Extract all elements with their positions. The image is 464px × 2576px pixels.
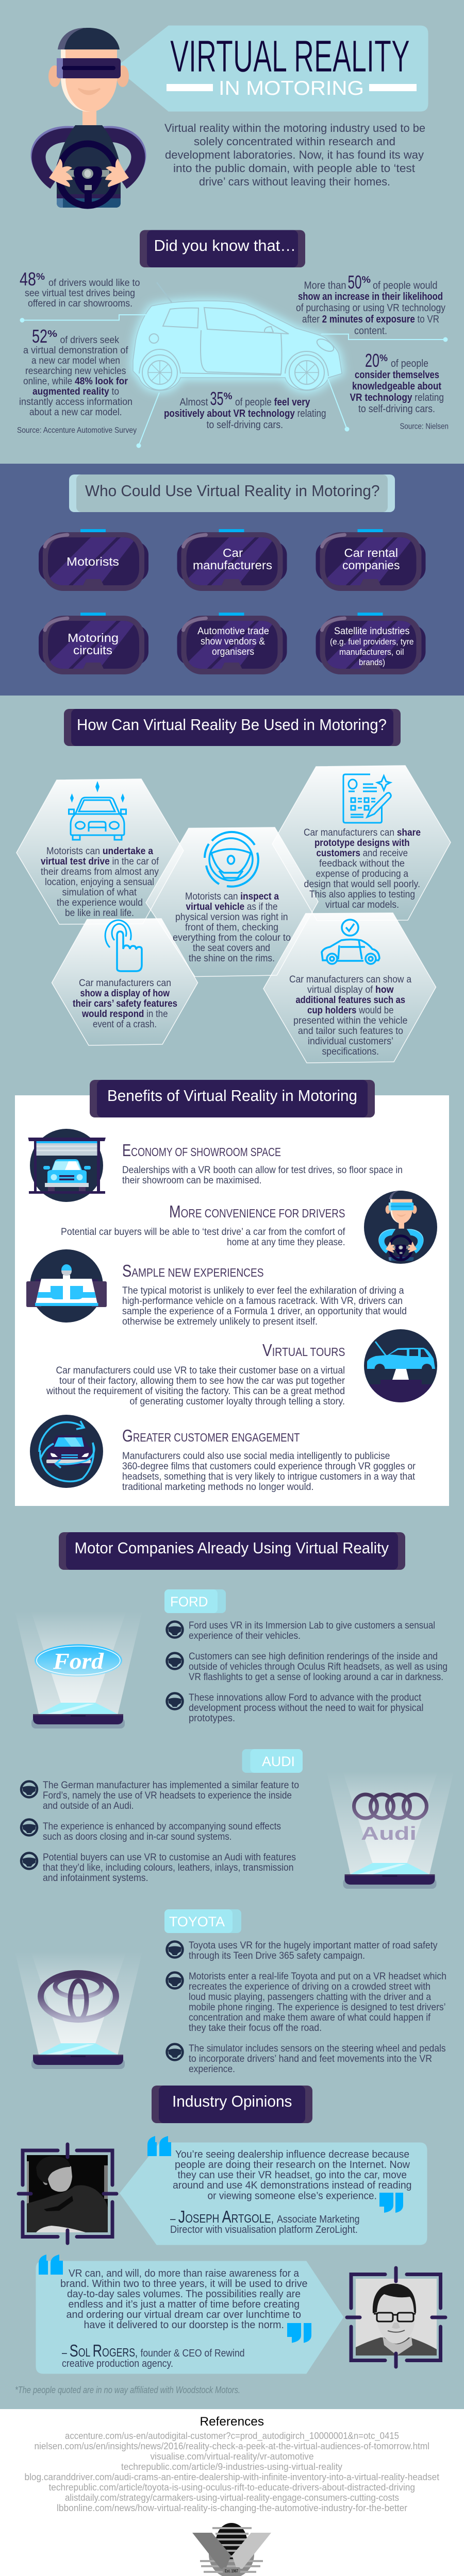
reference links: blog.caranddriver.com/audi-crams-an-entire-dealership-with-infinite-inventory-into-a-virtual-reality-headset xyxy=(25,2472,439,2482)
heading: how can VR be used xyxy=(64,709,401,746)
bullets: Ford xyxy=(167,1620,448,1724)
quote text: and ordering our virtual dream car over lunchtime to xyxy=(66,2309,301,2320)
text: inspect virtual vehicle: virtual vehicle as if the xyxy=(186,902,277,912)
text: virtual test drive: location, enjoying a sensual xyxy=(45,877,154,888)
reference links: accenture.com/us-en/autodigital-customer?c=prod_autodigirch_10000001&n=otc_0415 xyxy=(65,2431,399,2442)
icon: touch finger xyxy=(105,920,142,971)
stat: 48%: see virtual test drives being xyxy=(25,288,135,299)
bullets: Audi: and infotainment systems. xyxy=(43,1873,148,1884)
goggle: satellite industries: (e.g. fuel providers, tyre xyxy=(330,637,413,647)
benefit: more convenience: Potential car buyers will be able to ‘test drive’ a car from the comfort of xyxy=(61,1227,345,1238)
benefit: virtual tours: tour of their factory, allowing them to see how the car was put together xyxy=(59,1376,345,1386)
heading: who could use xyxy=(69,474,395,512)
heading: did you know: Did you know that… xyxy=(154,236,296,255)
stat: 52%: researching new vehicles xyxy=(25,366,126,377)
bullets: Toyota: experience. xyxy=(189,2064,235,2075)
benefit: greater customer engagement xyxy=(122,1426,416,1493)
bullets: Ford: experience of their vehicles. xyxy=(189,1631,301,1641)
icon: car with tick xyxy=(322,920,379,964)
bullets: Ford: Customers can see high definition renderings of the inside and xyxy=(189,1651,438,1662)
goggle: car manufacturers xyxy=(177,529,287,591)
attribution: Director with visualisation platform ZeroLight. xyxy=(170,2224,358,2235)
benefit: virtual tours: Car manufacturers could use VR to take their customer base on a virtual xyxy=(56,1365,345,1376)
benefit: sample new experiences xyxy=(122,1261,407,1327)
text: safety features display: their cars’ safety features xyxy=(73,998,177,1009)
heading: who could use: Who Could Use Virtual Reality in Motoring? xyxy=(85,482,379,500)
stat: 48%: 48 xyxy=(20,268,36,290)
stat: 52%: about a new car model. xyxy=(29,407,122,418)
stat: 50%: More than xyxy=(304,280,346,292)
goggle: trade show vendors xyxy=(177,613,287,674)
icon: showroom garage xyxy=(28,1129,106,1202)
Ford badge: Ford xyxy=(53,1649,104,1674)
reference links: visualise.com/virtual-reality/vr-automotive xyxy=(151,2451,313,2462)
stat: 20%: VR technology relating xyxy=(350,392,444,403)
benefit: greater customer engagement: traditional marketing methods no longer would. xyxy=(122,1482,313,1493)
reference links: lbbonline.com/news/how-virtual-reality-is-changing-the-automotive-industry-for-the-better xyxy=(57,2503,407,2513)
stat: 52%: online, while 48% look for xyxy=(23,376,128,387)
text: additional features: Car manufacturers can show a xyxy=(289,974,411,985)
attribution: – JOSEPH ARTGOLE, xyxy=(170,2207,274,2226)
text: share prototype designs: customers and receive xyxy=(317,848,408,859)
text: additional features: presented within the vehicle xyxy=(293,1015,407,1026)
benefit: greater customer engagement: GREATER CUSTOMER ENGAGEMENT xyxy=(122,1426,300,1445)
text: inspect virtual vehicle: front of them, checking xyxy=(185,922,278,933)
benefit: sample new experiences: otherwise be extremely unlikely to present itself. xyxy=(122,1316,318,1327)
text: virtual test drive: the experience would xyxy=(57,897,143,908)
heading: industry opinions xyxy=(152,2086,312,2123)
attribution: creative production agency. xyxy=(62,2358,173,2369)
bullets: Toyota: concentration and make them aware of what could happen if xyxy=(189,2012,431,2023)
reference links: techrepublic.com/article/toyota-is-using-oculus-rift-to-educate-drivers-about-distracted-driving xyxy=(48,2482,415,2493)
subtitle with bars xyxy=(167,77,417,99)
stat: 48%: offered in car showrooms. xyxy=(28,298,132,309)
intro paragraph: development laboratories. Now, it has found its way xyxy=(165,148,424,161)
subtitle with bars: IN MOTORING xyxy=(219,77,364,99)
text: safety features display: would respond in the xyxy=(81,1009,168,1020)
label: Audi xyxy=(242,1749,303,1773)
bullets: Ford: prototypes. xyxy=(189,1713,235,1724)
goggle: trade show vendors: Automotive trade xyxy=(197,626,269,637)
heading: industry opinions: Industry Opinions xyxy=(172,2092,292,2110)
goggle: satellite industries: manufacturers, oil xyxy=(339,647,404,657)
text: additional features: individual customers’ xyxy=(308,1036,393,1047)
reference links: nielsen.com/us/en/insights/news/2016/reality-check-a-peek-at-the-virtual-audiences-of-tomorrow.html xyxy=(34,2441,429,2451)
intro paragraph: solely concentrated within research and xyxy=(194,135,395,148)
bullets: Audi: and outside of an Audi. xyxy=(43,1801,134,1811)
hologram projector: Ford logo xyxy=(15,1611,142,1728)
benefit: economy of showroom space: Dealerships with a VR booth can allow for test drives, so floor space in xyxy=(122,1165,403,1176)
reference links: techrepublic.com/article/9-industries-using-virtual-reality xyxy=(121,2462,342,2472)
stat: 50%: % xyxy=(362,275,371,285)
quote text: people are doing their research on the Internet. Now xyxy=(175,2159,410,2171)
text: safety features display xyxy=(73,978,177,1030)
benefit: economy of showroom space: ECONOMY OF SHOWROOM SPACE xyxy=(122,1141,281,1160)
attribution xyxy=(170,2207,360,2235)
heading: motor companies xyxy=(59,1532,405,1570)
goggle: car rental companies xyxy=(316,529,426,591)
text: virtual test drive: virtual test drive in the car of xyxy=(41,856,159,867)
text: additional features: virtual display of how xyxy=(307,985,394,995)
text: share prototype designs: expense of producing a xyxy=(316,869,408,879)
stat: 52%: a virtual demonstration of xyxy=(23,345,128,356)
text: safety features display: Car manufacturers can xyxy=(79,978,171,989)
stat: 20%: to self-driving cars. xyxy=(358,403,435,415)
panel: benefits white card xyxy=(15,1095,449,1506)
bullets: Audi: Potential buyers can use VR to customise an Audi with features xyxy=(43,1852,296,1863)
illustration: driver with VR headset xyxy=(38,28,139,208)
stat: 35%: % xyxy=(224,391,232,401)
bullets: Audi: The experience is enhanced by accompanying sound effects xyxy=(43,1821,281,1832)
text: additional features xyxy=(289,974,411,1057)
quote text: brand. Within two to three years, it will be used to drive xyxy=(60,2278,307,2290)
hologram projector: Toyota logo xyxy=(15,1952,142,2069)
stat: 50%: 50 xyxy=(347,272,362,293)
text: inspect virtual vehicle: Motorists can inspect a xyxy=(185,891,279,902)
bullets: Audi: that they’d like, including colours, leathers, inlays, transmission xyxy=(43,1862,294,1873)
text: inspect virtual vehicle: the seat covers and xyxy=(193,943,270,954)
intro paragraph xyxy=(164,122,425,188)
goggle: car manufacturers: Car xyxy=(223,546,243,560)
goggle: satellite industries xyxy=(316,613,426,674)
stat: 52%: 52 xyxy=(32,326,47,347)
benefit: sample new experiences: high-performance vehicle on a famous racetrack. With VR, drivers can xyxy=(122,1296,403,1307)
benefit: virtual tours: of generating customer loyalty through telling a story. xyxy=(130,1396,345,1407)
bullets: Ford: These innovations allow Ford to advance with the product xyxy=(189,1692,422,1703)
text: inspect virtual vehicle: the shine on the rims. xyxy=(189,953,275,964)
attribution xyxy=(62,2341,244,2369)
quote text: endless and it’s just a matter of time before creating xyxy=(68,2299,300,2310)
stat: 35% xyxy=(164,388,326,431)
stat: 35%: Almost xyxy=(179,397,208,408)
quote text: around and use 4K demonstrations instead of reading xyxy=(173,2180,411,2191)
icon: steering wheel xyxy=(205,832,258,887)
icon: front of car with sparkles xyxy=(69,781,126,840)
benefit: sample new experiences: sample the experience of a Formula 1 driver, an opportunity that would xyxy=(122,1306,407,1317)
icon: prototype checklist and pencil xyxy=(343,774,391,823)
connector lines with dots xyxy=(21,315,448,447)
benefit: greater customer engagement: 360-degree films that customers could experience through VR goggles or xyxy=(122,1461,416,1472)
source: Nielsen: Source: Nielsen xyxy=(400,422,449,431)
bullets: Audi: such as doors closing and in-car sound systems. xyxy=(43,1832,232,1842)
attribution: founder & CEO of Rewind xyxy=(140,2348,244,2359)
opening quote mark xyxy=(39,2255,63,2275)
text: share prototype designs: Car manufacturers can share xyxy=(304,827,421,838)
Toyota emblem xyxy=(41,1973,116,2020)
intro paragraph: Virtual reality within the motoring industry used to be xyxy=(164,122,425,134)
stat: 35%: positively about VR technology relating xyxy=(164,408,326,419)
stat: 50%: after 2 minutes of exposure to VR xyxy=(302,314,439,325)
benefit: more convenience: MORE CONVENIENCE FOR DRIVERS xyxy=(169,1202,345,1221)
stat: 52%: instantly access information xyxy=(19,397,132,408)
text: inspect virtual vehicle: physical version was right in xyxy=(175,912,288,923)
benefit: greater customer engagement: Manufacturers could also use social media intelligently to publicise xyxy=(122,1451,390,1462)
quote bubble: Joseph Artgole xyxy=(120,2136,427,2245)
bullets: Toyota: mobile phone ringing. The experience is designed to test drivers’ xyxy=(189,2002,445,2013)
stat: 20%: of people xyxy=(391,358,428,369)
text: safety features display: show a display of how xyxy=(80,988,170,999)
references panel xyxy=(0,2409,464,2576)
text: virtual test drive: simulation of what xyxy=(62,887,137,898)
goggle: trade show vendors: organisers xyxy=(212,647,254,657)
stat: 50%: of people would xyxy=(373,280,437,292)
stat: 35%: of people feel very xyxy=(235,397,310,408)
goggle: motorists: Motorists xyxy=(67,555,119,568)
stat: 52%: augmented reality to xyxy=(32,386,119,397)
text: safety features display: event of a crash. xyxy=(93,1019,157,1030)
logo: Woodstock Motors: Est. 1967 xyxy=(225,2569,238,2573)
bullets: Ford: Ford uses VR in its Immersion Lab to give customers a sensual xyxy=(189,1620,435,1631)
bullets: Audi: Ford’s, namely the use of VR headsets to experience the inside xyxy=(43,1790,292,1801)
quote text: VR can, and will, do more than raise awareness for a xyxy=(69,2268,300,2279)
bullets: Toyota: to incorporate drivers’ hand and feet movements into the VR xyxy=(189,2054,432,2064)
hexagon panels xyxy=(16,766,451,1063)
icon: car with rotation arrows xyxy=(30,1415,103,1488)
stat: 20%: knowledgeable about xyxy=(352,381,441,392)
benefit: virtual tours xyxy=(46,1341,345,1407)
quote text: or viewing someone else’s experience. xyxy=(207,2191,377,2202)
references heading: References xyxy=(200,2415,264,2429)
text: inspect virtual vehicle: everything from the colour to xyxy=(173,933,291,943)
stat: 52%: a new car model when xyxy=(31,355,120,366)
label: Ford xyxy=(164,1589,226,1613)
quote text: You’re seeing dealership influence decrease because xyxy=(175,2149,409,2160)
illustration: glowing car xyxy=(133,282,342,391)
stat: 52%: of drivers seek xyxy=(60,335,119,346)
label: Ford: FORD xyxy=(170,1594,208,1609)
bullets: Toyota: The simulator includes sensors on the steering wheel and pedals xyxy=(189,2043,445,2054)
intro paragraph: drive’ cars without leaving their homes. xyxy=(199,175,390,188)
stat: 50% xyxy=(296,272,445,337)
stat: 35%: 35 xyxy=(210,388,224,409)
attribution: – SOL ROGERS, xyxy=(62,2341,138,2360)
goggle: car rental companies: Car rental xyxy=(344,546,398,560)
stat: 20%: % xyxy=(379,353,388,363)
stat: 48%: % xyxy=(36,272,45,282)
bullets: Toyota: recreates the experience of driving on a crowded street with xyxy=(189,1981,430,1992)
stat: 52% xyxy=(19,326,132,418)
logo: Woodstock Motors xyxy=(192,2523,271,2576)
text: share prototype designs: virtual car models. xyxy=(325,900,399,910)
icon: racing car xyxy=(26,1249,107,1323)
heading: did you know xyxy=(140,230,305,267)
heading: benefits xyxy=(90,1080,375,1117)
hero title callout xyxy=(120,26,428,111)
bullets: Toyota: Toyota uses VR for the hugely important matter of road safety xyxy=(189,1940,438,1951)
benefit: greater customer engagement: headsets, something that is very likely to intrigue customers in a way that xyxy=(122,1471,416,1482)
goggle: satellite industries: brands) xyxy=(359,657,385,667)
heading: benefits: Benefits of Virtual Reality in Motoring xyxy=(107,1087,357,1105)
stat: 20%: consider themselves xyxy=(355,369,439,381)
Audi wordmark: Audi xyxy=(361,1823,417,1844)
text: additional features: specifications. xyxy=(322,1046,379,1057)
quote text: have it delivered to our doorstep is the norm. xyxy=(84,2319,284,2331)
bullets: Ford: development process without the need to wait for physical xyxy=(189,1703,424,1714)
goggle: car manufacturers: manufacturers xyxy=(193,558,272,572)
source: Accenture: Source: Accenture Automotive Survey xyxy=(17,426,137,435)
stat: 48% xyxy=(20,268,140,309)
text: share prototype designs: prototype designs with xyxy=(314,838,409,849)
footnote: *The people quoted are in no way affiliated with Woodstock Motors. xyxy=(15,2385,240,2395)
goggle: trade show vendors: show vendors & xyxy=(201,636,265,647)
bullets: Toyota: Motorists enter a real-life Toyota and put on a VR headset which xyxy=(189,1971,446,1982)
quote text xyxy=(173,2149,411,2202)
quote text: they can use their VR headset, go into the car, move xyxy=(177,2170,407,2181)
text: share prototype designs xyxy=(304,827,421,910)
benefit: economy of showroom space xyxy=(122,1141,403,1186)
bullets: Toyota: through its Teen Drive 365 safety campaign. xyxy=(189,1951,365,1961)
photo frame: Joseph Artgole xyxy=(19,2144,117,2243)
reference links xyxy=(25,2431,439,2513)
text: virtual test drive: be like in real life. xyxy=(65,908,134,919)
label: Toyota xyxy=(164,1909,241,1933)
text: share prototype designs: This also applies to testing xyxy=(309,889,415,900)
closing quote mark xyxy=(287,2323,311,2343)
text: additional features: cup holders would be xyxy=(307,1005,394,1016)
Ford badge xyxy=(35,1645,122,1676)
closing quote mark xyxy=(379,2193,403,2213)
stat: 35%: to self-driving cars. xyxy=(206,419,283,431)
quote text: day-to-day sales volumes. The possibilities really are xyxy=(67,2289,301,2300)
hologram projector: Audi logo xyxy=(327,1771,454,1889)
quote bubble: Sol Rogers xyxy=(36,2255,343,2374)
goggle: motoring circuits: Motoring xyxy=(68,631,119,645)
goggle: motoring circuits: circuits xyxy=(73,643,112,657)
label: Toyota: TOYOTA xyxy=(169,1914,225,1929)
goggle: satellite industries: Satellite industries xyxy=(334,626,409,637)
stat: 20%: 20 xyxy=(365,350,379,371)
text: share prototype designs: design that would sell poorly. xyxy=(304,879,420,890)
bullets: Toyota xyxy=(167,1940,446,2075)
benefit: more convenience xyxy=(61,1202,345,1248)
benefit: virtual tours: VIRTUAL TOURS xyxy=(262,1341,345,1360)
text: additional features: and tailor such features to xyxy=(298,1026,403,1037)
panel: who could use VR band xyxy=(0,464,464,696)
Audi rings xyxy=(354,1794,427,1818)
bullets: Ford: VR flashlights to get a sense of looking around a car in darkness. xyxy=(189,1672,443,1683)
benefit: virtual tours: without the requirement of visiting the factory. This can be a great method xyxy=(46,1386,345,1397)
icon: mini driver xyxy=(364,1191,437,1264)
icon: car on lift xyxy=(364,1329,437,1402)
benefit: more convenience: home at any time they please. xyxy=(227,1237,345,1248)
bullets: Toyota: loud music playing, passengers chatting with the driver and a xyxy=(189,1992,431,2003)
bullets: Toyota: they take their focus off the road. xyxy=(189,2023,322,2033)
benefit: sample new experiences: SAMPLE NEW EXPERIENCES xyxy=(122,1261,264,1280)
stat: 50%: of purchasing or using VR technology xyxy=(296,302,445,314)
benefit: economy of showroom space: their showroom can be maximised. xyxy=(122,1175,262,1186)
stat: 50%: content. xyxy=(354,326,387,337)
text: virtual test drive: Motorists can undertake a xyxy=(46,846,153,857)
intro paragraph: into the public domain, with people able to ‘test xyxy=(173,162,415,175)
heading: how can VR be used: How Can Virtual Reality Be Used in Motoring? xyxy=(77,716,387,734)
quote text xyxy=(60,2268,307,2331)
text: share prototype designs: feedback without the xyxy=(319,858,405,869)
attribution: Associate Marketing xyxy=(277,2214,360,2225)
text: additional features: additional features such as xyxy=(296,995,405,1006)
photo frame: Sol Rogers xyxy=(347,2268,445,2367)
reference links: alistdaily.com/strategy/carmakers-using-virtual-reality-engage-consumers-cutting-costs xyxy=(65,2493,399,2503)
bullets: Audi xyxy=(21,1780,299,1884)
goggle: car rental companies: companies xyxy=(342,558,400,572)
label: Audi: AUDI xyxy=(262,1754,295,1769)
text: inspect virtual vehicle xyxy=(173,891,291,964)
opening quote mark xyxy=(147,2136,171,2156)
goggle: motoring circuits xyxy=(39,613,148,674)
heading: motor companies: Motor Companies Already Using Virtual Reality xyxy=(74,1539,389,1557)
stat: 52%: % xyxy=(47,329,57,339)
stat: 48%: of drivers would like to xyxy=(48,278,140,289)
text: virtual test drive: their dreams from almost any xyxy=(41,867,159,877)
text: virtual test drive xyxy=(41,846,159,919)
stat: 20% xyxy=(350,350,444,415)
benefit: sample new experiences: The typical motorist is unlikely to ever feel the exhilaration of driving a xyxy=(122,1285,404,1296)
goggle: motorists xyxy=(39,529,148,591)
bullets: Audi: The German manufacturer has implemented a similar feature to xyxy=(43,1780,299,1791)
